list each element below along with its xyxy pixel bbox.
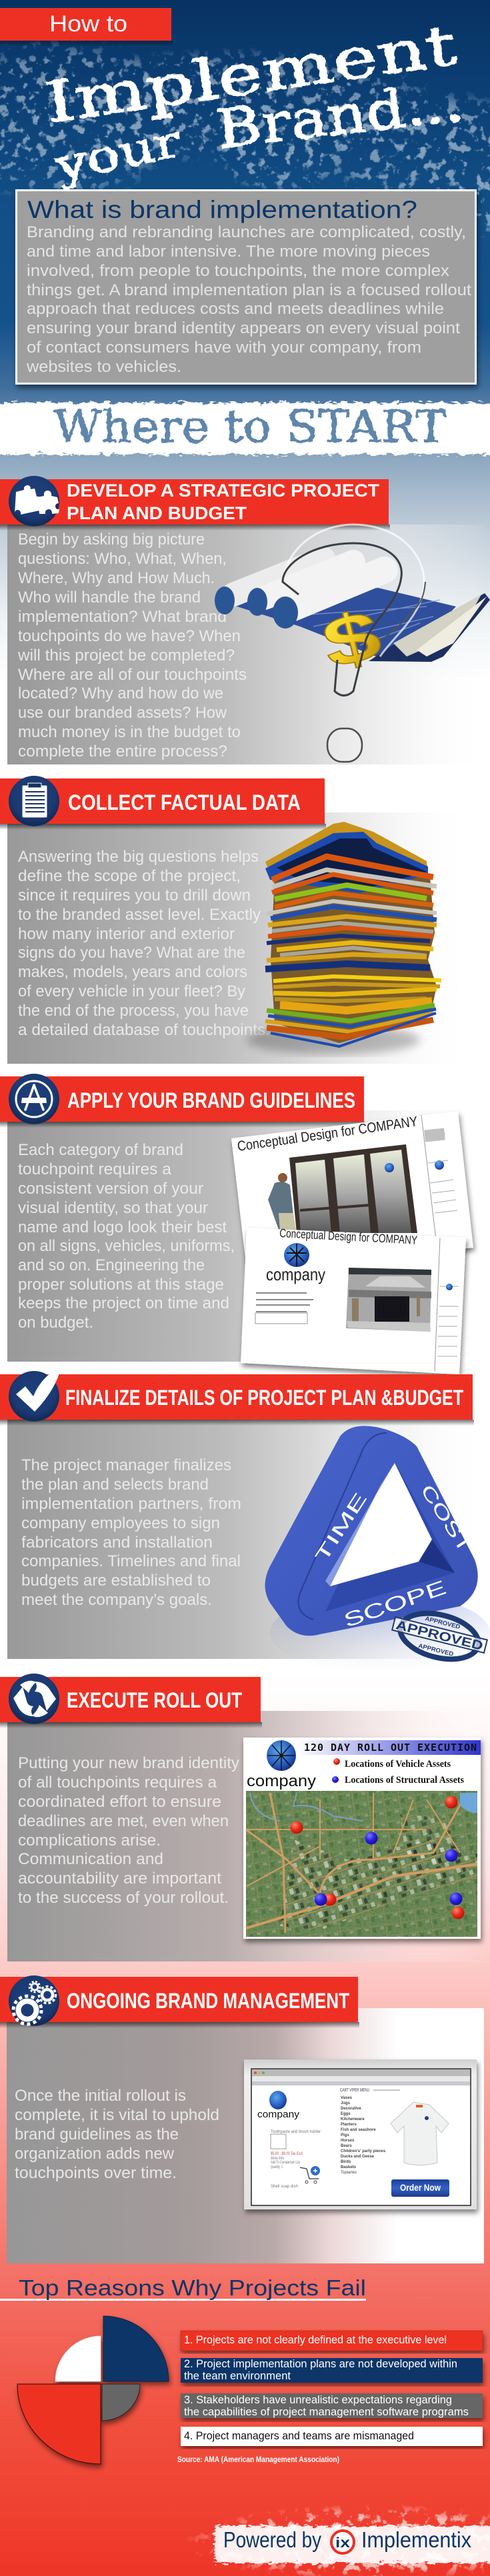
heading: where to start: Where to START xyxy=(53,401,447,453)
text block: complete, it is vital to uphold xyxy=(15,2106,219,2124)
text block: a detailed database of touchpoints. xyxy=(18,1021,270,1039)
text block: to the branded asset level. Exactly xyxy=(18,906,261,924)
panel background xyxy=(7,1110,474,1362)
footer: powered by implementix xyxy=(183,2504,490,2576)
label: time: TIME xyxy=(311,1489,371,1566)
text block: Once the initial rollout is xyxy=(15,2087,186,2105)
text block: definition: involved, from people to touchpoints, the more complex xyxy=(27,262,449,280)
section 6: ongoing brand management xyxy=(0,1975,484,2263)
text block: how many interior and exterior xyxy=(18,925,235,943)
store menu: Children's' party pieces xyxy=(341,2149,386,2153)
store menu: Jugs xyxy=(341,2101,351,2105)
text block: accountability are important xyxy=(18,1870,221,1888)
text block: Begin by asking big picture xyxy=(18,531,205,549)
store menu: Birds xyxy=(341,2160,351,2164)
store product list: Add To Comparison List xyxy=(271,2161,300,2165)
text block: brand guidelines as the xyxy=(15,2125,179,2143)
banner xyxy=(0,1374,474,1426)
source note: Source: AMA (American Management Association) xyxy=(177,2455,339,2464)
store menu: Pigs xyxy=(341,2133,349,2137)
text block: define the scope of the project, xyxy=(18,867,241,885)
text block: to the success of your rollout. xyxy=(18,1889,229,1907)
logo: ix: ix xyxy=(335,2535,350,2551)
image: conceptual logo design sheet xyxy=(241,1226,466,1374)
text block: name and logo look their best xyxy=(18,1218,227,1236)
text block: definition: things get. A brand implementation plan is a focused rollout xyxy=(27,281,471,299)
map xyxy=(246,1791,477,1937)
text block: Where are all of our touchpoints xyxy=(18,666,247,684)
text block xyxy=(17,531,247,760)
legend: Locations of Structural Assets xyxy=(345,1775,464,1786)
stamp: approved: APPROVED xyxy=(425,1615,461,1630)
text block: meet the company’s goals. xyxy=(21,1591,212,1609)
icon: compass app xyxy=(9,1074,59,1124)
text block: touchpoints over time. xyxy=(15,2164,177,2182)
store menu: Fish and seashore xyxy=(341,2128,376,2132)
list: reasons xyxy=(181,2331,483,2446)
chalk smudges xyxy=(0,33,490,240)
image: conceptual door design sheet: Conceptual Design for COMPANY xyxy=(236,1114,419,1154)
text block: makes, models, years and colors xyxy=(18,963,247,981)
store menu: CART VIPER MENU xyxy=(340,2088,369,2093)
text block xyxy=(18,848,270,1039)
icon: dollar sign: $ xyxy=(315,595,388,684)
section 1: strategic project plan xyxy=(0,476,490,764)
heading: EXECUTE ROLL OUT xyxy=(67,1688,242,1712)
text block: of all touchpoints requires a xyxy=(18,1774,217,1792)
text block: definition xyxy=(26,223,471,376)
text block: Where, Why and How Much. xyxy=(18,569,215,587)
text block: proper solutions at this stage xyxy=(18,1276,224,1294)
store product list: Shell soap dish xyxy=(271,2185,298,2189)
reason 3: the capabilities of project management software programs xyxy=(184,2405,469,2418)
image: roll out map card xyxy=(243,1738,481,1939)
map pins xyxy=(291,1796,464,1920)
title banner: How to xyxy=(0,8,173,47)
section 3: apply brand guidelines xyxy=(0,1074,474,1374)
banner xyxy=(0,479,390,531)
store menu: Ducks and Geese xyxy=(341,2155,375,2159)
text block: definition: Branding and rebranding launches are complicated, costly, xyxy=(27,223,466,241)
store menu: Baskets xyxy=(341,2165,357,2169)
title line: Brand: Brand... xyxy=(213,71,467,161)
text block: Each category of brand xyxy=(18,1141,183,1159)
banner xyxy=(0,1076,365,1128)
heading xyxy=(67,481,380,523)
store menu: Eggs xyxy=(341,2112,351,2116)
image: laptop with web store xyxy=(244,2059,477,2209)
store menu xyxy=(340,2088,400,2175)
text block: deadlines are met, even when xyxy=(18,1812,229,1830)
stamp: approved xyxy=(388,1604,490,1668)
text block: use our branded assets? How xyxy=(18,704,227,722)
text block: The project manager finalizes xyxy=(21,1456,231,1474)
icon: clipboard xyxy=(9,776,59,826)
reason 1: 1. Projects are not clearly defined at the executive level xyxy=(184,2333,447,2346)
legend: Locations of Vehicle Assets xyxy=(345,1759,451,1770)
text block: the plan and selects brand xyxy=(21,1476,209,1494)
text block xyxy=(21,1456,241,1609)
text block: much money is in the budget to xyxy=(18,723,241,741)
text block: visual identity, so that your xyxy=(18,1199,208,1217)
text block: implementation partners, from xyxy=(21,1495,241,1513)
reason 4: 4. Project managers and teams are mismanaged xyxy=(184,2429,414,2442)
heading: what is brand implementation: What is brand implementation? xyxy=(27,196,417,223)
image: stack of folders xyxy=(247,822,441,1054)
label: scope: SCOPE xyxy=(341,1576,449,1632)
band: where to start xyxy=(0,401,490,455)
text block: touchpoints do we have? When xyxy=(18,627,241,645)
text block: companies. Timelines and final xyxy=(21,1552,241,1570)
section 2: collect factual data xyxy=(0,776,474,1064)
store product list xyxy=(271,2130,321,2189)
text block: definition: ensuring your brand identity appears on every visual point xyxy=(27,319,460,337)
store logo: company xyxy=(257,2109,300,2120)
reason 3 xyxy=(181,2393,483,2418)
text block: definition: and time and labor intensive. The more moving pieces xyxy=(27,243,430,261)
icon: refresh arrows xyxy=(9,1674,59,1724)
image: conceptual logo design sheet: company xyxy=(266,1264,325,1284)
store product list: Toothpaste and brush holder xyxy=(271,2130,321,2134)
heading: ONGOING BRAND MANAGEMENT xyxy=(67,1989,349,2013)
logo: ix xyxy=(331,2531,354,2553)
heading: PLAN AND BUDGET xyxy=(67,503,247,523)
text block: Putting your new brand identity xyxy=(18,1754,239,1772)
panel background xyxy=(7,1711,490,1961)
icon: question mark xyxy=(283,525,425,762)
image: time cost scope triangle xyxy=(265,1426,490,1673)
heading: How to: How to xyxy=(49,11,127,37)
text block: on all signs, vehicles, uniforms, xyxy=(18,1237,235,1255)
text block: Answering the big questions helps xyxy=(18,848,259,866)
text block: located? Why and how do we xyxy=(18,684,223,702)
store product list: $5.00 - $8.00 Tax Excl xyxy=(271,2152,303,2156)
store menu: Vases xyxy=(341,2096,353,2100)
title line: Your: your xyxy=(50,115,186,192)
text block: keeps the project on time and xyxy=(18,1294,229,1312)
text block: since it requires you to drill down xyxy=(18,886,251,904)
panel background xyxy=(7,1420,490,1659)
panel background xyxy=(7,2008,484,2263)
company logo: company xyxy=(247,1772,316,1790)
image: conceptual logo design sheet: Conceptual Design for COMPANY xyxy=(279,1226,418,1247)
store menu: Decorative xyxy=(341,2107,361,2111)
shirt xyxy=(391,2102,449,2165)
store logo xyxy=(257,2091,300,2120)
store menu: Horses xyxy=(341,2139,355,2143)
title line: Implement: Implement xyxy=(41,12,461,136)
text block: on budget. xyxy=(18,1314,93,1332)
text block: coordinated effort to ensure xyxy=(18,1793,221,1811)
reason 2 xyxy=(181,2357,483,2383)
store menu: Planters xyxy=(341,2123,357,2127)
store product list: Quantity: 1 xyxy=(271,2165,283,2169)
icon: check mark xyxy=(9,1366,61,1422)
panel background xyxy=(7,812,474,1064)
store menu: Kitchenware xyxy=(341,2117,365,2121)
button: order now: Order Now xyxy=(400,2182,441,2193)
store menu: Bears xyxy=(341,2144,352,2148)
store menu: Topiaries xyxy=(341,2171,357,2175)
text block: fabricators and installation xyxy=(21,1534,213,1552)
label: cost: COST xyxy=(417,1481,475,1556)
text block: definition: approach that reduces costs and meets deadlines while xyxy=(27,300,444,318)
legend xyxy=(332,1758,464,1786)
heading: DEVELOP A STRATEGIC PROJECT xyxy=(67,481,380,501)
panel: what is brand implementation xyxy=(16,191,476,384)
banner xyxy=(0,778,326,830)
stamp: approved: APPROVED xyxy=(418,1642,455,1658)
image: blueprints, dollar and question mark xyxy=(215,525,490,762)
store product list: More Info xyxy=(271,2157,285,2161)
text block: implementation? What brand xyxy=(18,608,227,626)
heading: COLLECT FACTUAL DATA xyxy=(68,790,301,814)
text block: signs do you have? What are the xyxy=(18,944,245,962)
text block: company employees to sign xyxy=(21,1514,220,1532)
reason 4 xyxy=(181,2427,483,2446)
text block xyxy=(18,1754,239,1907)
map title: 120 DAY ROLL OUT EXECUTION xyxy=(304,1742,477,1754)
map header xyxy=(297,1740,481,1755)
reason 2: the team environment xyxy=(184,2369,291,2382)
implementix: Implementix xyxy=(361,2527,471,2552)
chalk title xyxy=(41,12,467,192)
cart icon xyxy=(300,2166,320,2183)
text block: questions: Who, What, When, xyxy=(18,550,227,568)
text block: definition: of contact consumers have with your company, from xyxy=(27,339,421,357)
text block: and so on. Engineering the xyxy=(18,1256,205,1274)
icon: gears xyxy=(9,1975,59,2026)
text block: complete the entire process? xyxy=(18,742,227,760)
reason 1 xyxy=(181,2331,483,2351)
stamp: approved: APPROVED xyxy=(395,1618,485,1654)
text block: complications arise. xyxy=(18,1832,161,1850)
company logo xyxy=(247,1740,316,1790)
text block: Who will handle the brand xyxy=(18,589,201,607)
text block: of every vehicle in your fleet? By xyxy=(18,982,245,1000)
text block: organization adds new xyxy=(15,2145,175,2163)
text block: the end of the process, you have xyxy=(18,1002,249,1020)
heading: top reasons: Top Reasons Why Projects Fail xyxy=(19,2275,366,2300)
button: order now xyxy=(391,2179,449,2197)
text block: will this project be completed? xyxy=(17,646,235,664)
powered by: Powered by xyxy=(223,2527,321,2552)
chart: pie quadrants xyxy=(17,2316,169,2464)
banner xyxy=(0,1977,359,2028)
reason 3: 3. Stakeholders have unrealistic expectations regarding xyxy=(184,2393,452,2406)
text block xyxy=(15,2087,219,2182)
banner xyxy=(0,1677,262,1728)
text block: budgets are established to xyxy=(21,1572,211,1590)
reason 2: 2. Project implementation plans are not developed within xyxy=(184,2357,457,2370)
image: conceptual door design sheet xyxy=(231,1111,473,1270)
text block: consistent version of your xyxy=(18,1180,203,1198)
text block: definition: websites to vehicles. xyxy=(26,358,181,376)
icon: puzzle pieces xyxy=(9,476,59,527)
text block: touchpoint requires a xyxy=(18,1160,172,1178)
text block xyxy=(18,1141,235,1332)
heading: APPLY YOUR BRAND GUIDELINES xyxy=(67,1088,355,1112)
panel background xyxy=(7,525,490,764)
section 4: finalize details xyxy=(0,1366,490,1673)
text block: Communication and xyxy=(18,1850,163,1868)
section 5: execute roll out xyxy=(0,1674,490,1961)
